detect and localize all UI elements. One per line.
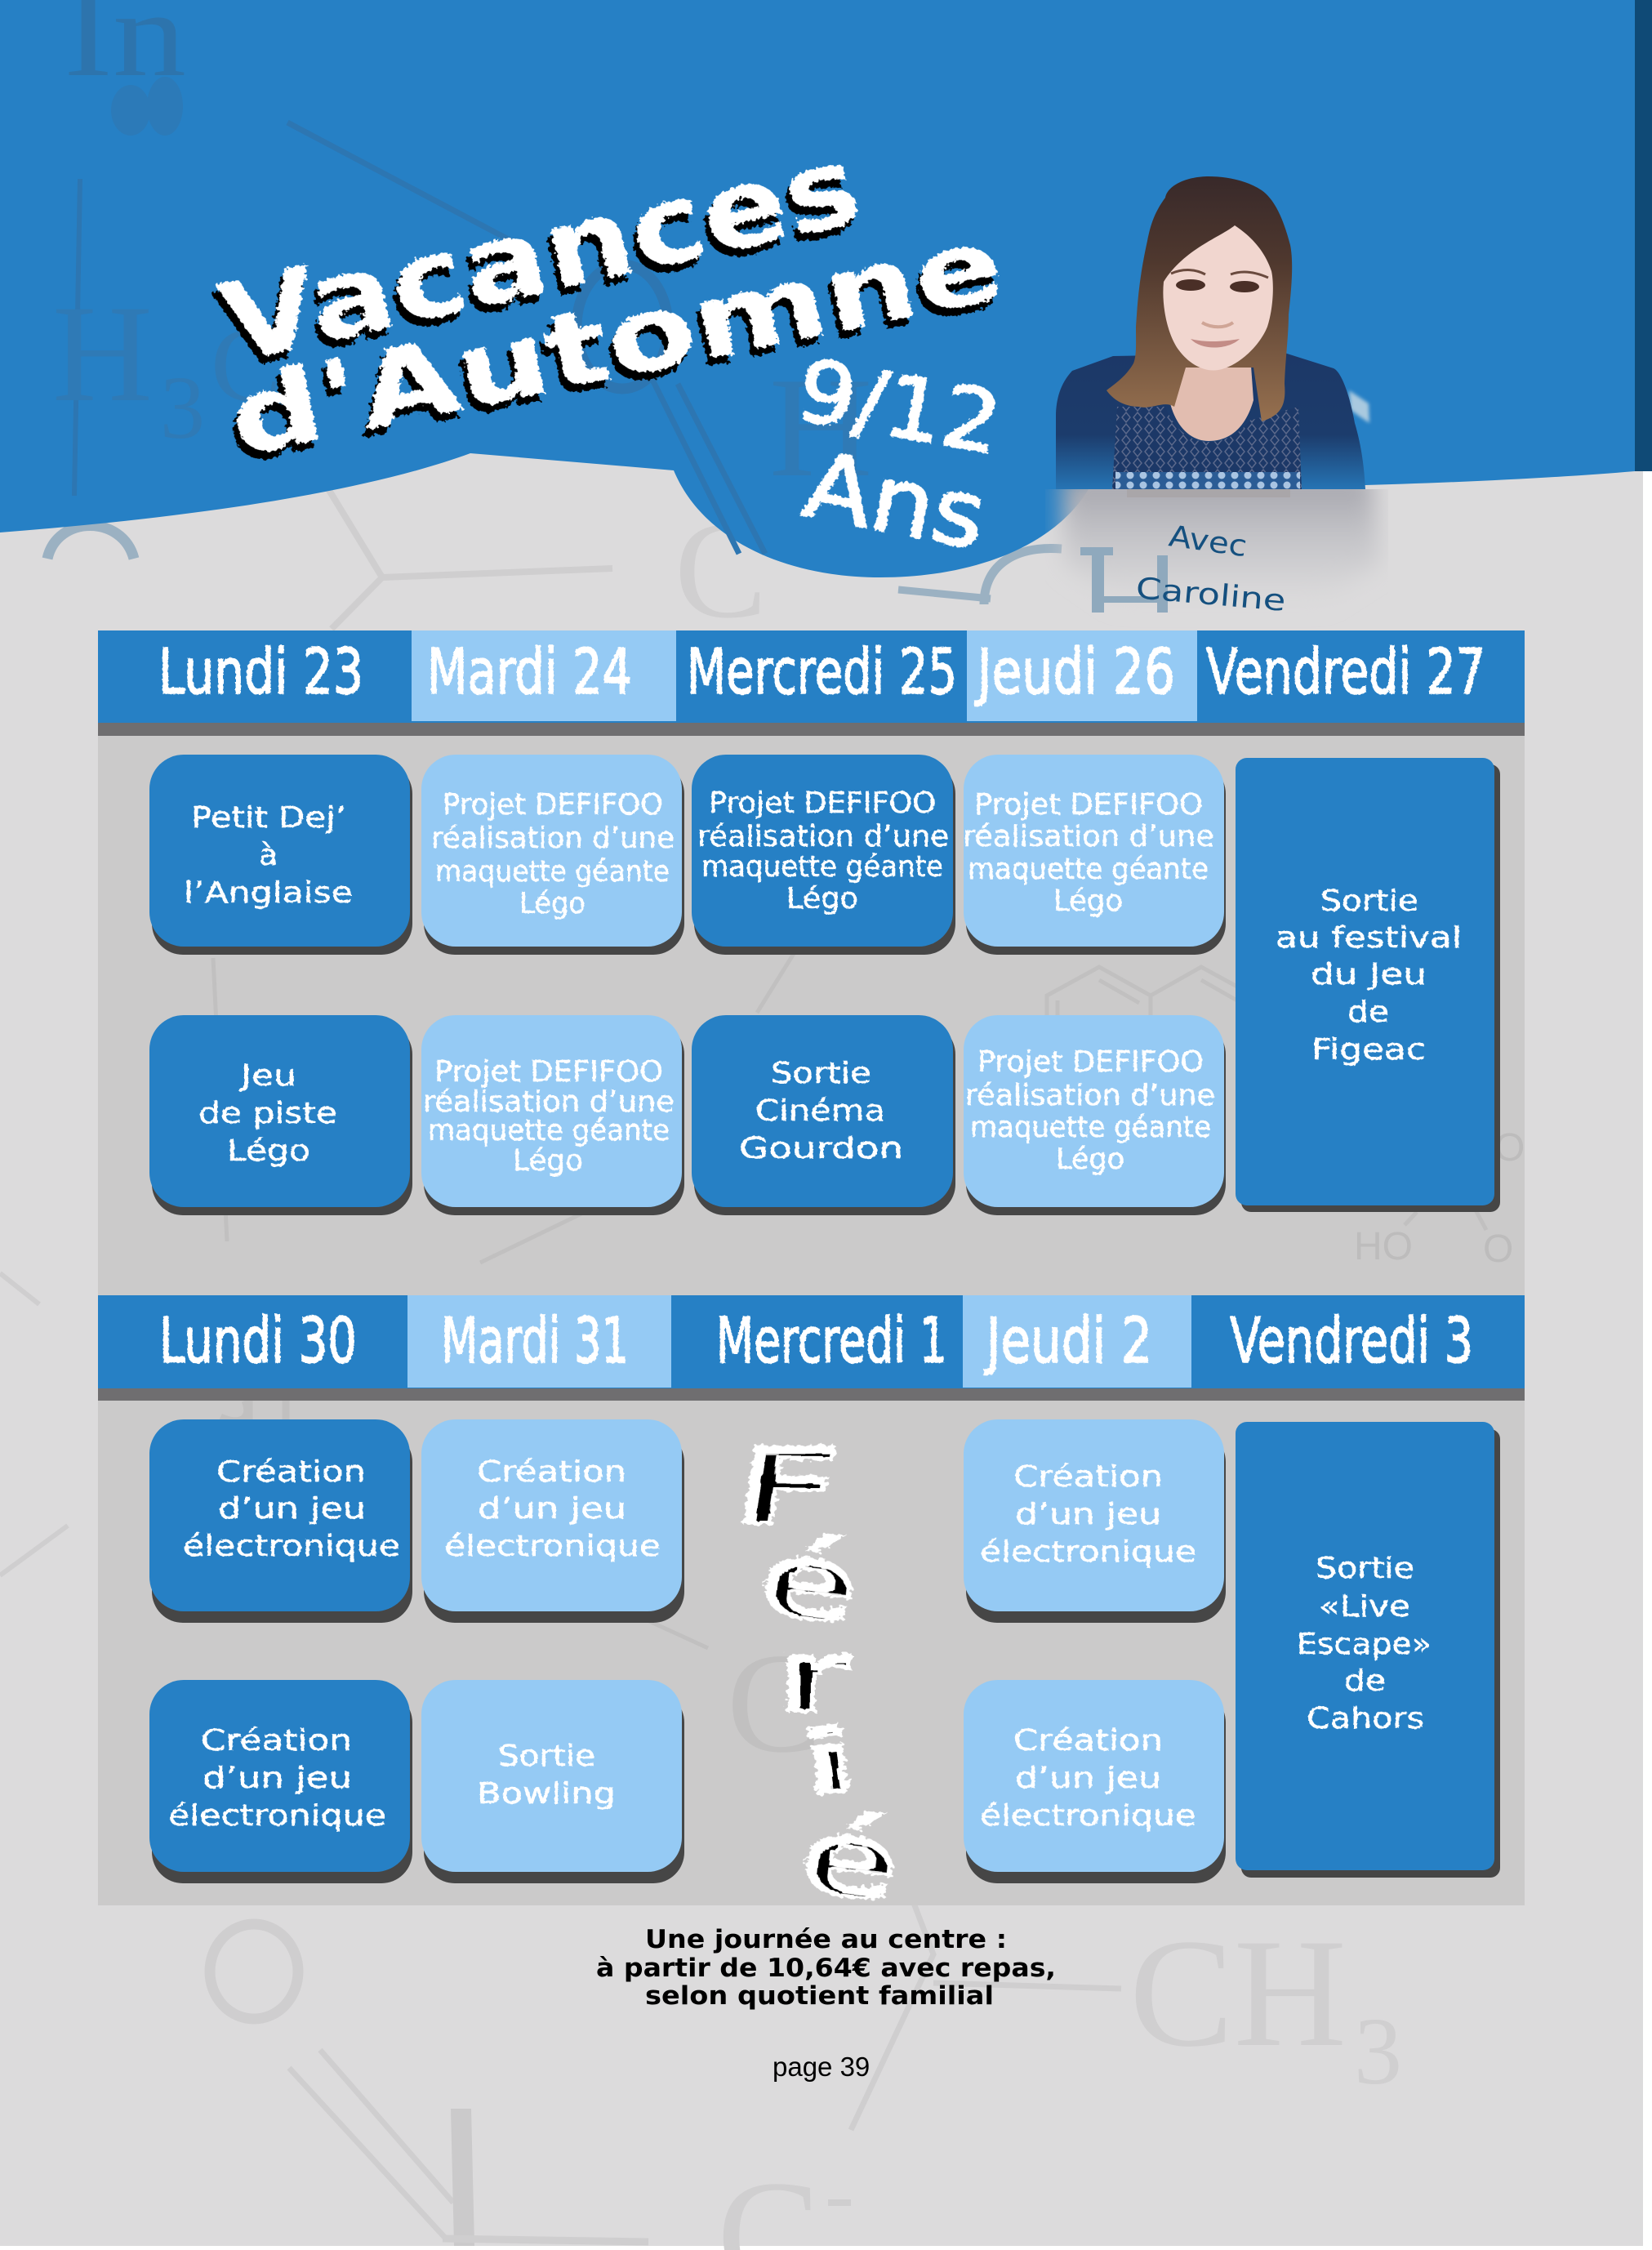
card: Jeu de piste Lego: Légo bbox=[227, 1134, 310, 1168]
card: Creation d'un jeu Jeudi 2 morning: électronique bbox=[980, 1535, 1196, 1569]
day: Mercredi 1: Mercredi 1 bbox=[716, 1305, 947, 1378]
age range: 9/12 bbox=[790, 340, 1009, 474]
card: Sortie au festival du Jeu de Figeac: Sortie bbox=[1320, 884, 1418, 918]
card: Creation d'un jeu Lundi 30 morning: Création bbox=[216, 1455, 366, 1489]
card: Sortie au festival du Jeu de Figeac: de bbox=[1347, 996, 1389, 1029]
day: Vendredi 3: Vendredi 3 bbox=[1230, 1305, 1473, 1378]
day: Mardi 31: Mardi 31 bbox=[441, 1305, 629, 1378]
title line 2: d'Automne bbox=[219, 203, 1013, 479]
background: ghost chemistry formulas on grey: CH bbox=[1129, 1908, 1347, 2079]
photo: beaded hem bbox=[1115, 472, 1300, 489]
card: Sortie Live Escape de Cahors: «Live bbox=[1319, 1590, 1410, 1624]
photo caption: Avec: Avec bbox=[1167, 519, 1249, 564]
dark right edge strip bbox=[1635, 0, 1652, 471]
card: Jeu de piste Lego bbox=[149, 1015, 412, 1215]
card: Creation d'un jeu Mardi 31 morning: électronique bbox=[444, 1530, 661, 1563]
card: Projet DEFIFOO Jeudi 26 morning: maquette géante bbox=[968, 853, 1209, 886]
card: Projet DEFIFOO Jeudi 26 morning: Légo bbox=[1053, 884, 1123, 918]
day: Lundi 23: Lundi 23 bbox=[158, 636, 363, 709]
title line 1: Vacances bbox=[210, 121, 871, 388]
card: Sortie Live Escape de Cahors: Cahors bbox=[1307, 1702, 1424, 1735]
card: Jeu de piste Lego: Jeu bbox=[239, 1059, 296, 1093]
photo caption: Caroline: Caroline bbox=[1134, 572, 1287, 618]
panel: ghost molecules behind the schedule: O bbox=[1494, 1126, 1525, 1170]
vertical label: Ferie bbox=[724, 1424, 907, 1928]
pricing note: Une journée au centre : bbox=[645, 1925, 1007, 1954]
card: Projet DEFIFOO Mardi 24 afternoon: Légo bbox=[513, 1144, 583, 1178]
background: ghost chemistry formulas on grey: 3 bbox=[1354, 1998, 1402, 2105]
background: ghost formulas on blue: 3 bbox=[160, 358, 205, 457]
card: Projet DEFIFOO Mercredi 25 morning: maquette géante bbox=[701, 850, 943, 884]
photo: paint splash bbox=[1349, 390, 1369, 423]
background: ghost formulas on blue: H bbox=[769, 348, 872, 506]
letter r: r bbox=[774, 1615, 853, 1738]
letter i: i bbox=[793, 1705, 866, 1820]
card: Projet DEFIFOO Jeudi 26 afternoon: réalisation d’une bbox=[965, 1079, 1215, 1112]
photo: Caroline bbox=[1056, 176, 1380, 618]
card: Sortie Cinema Gourdon bbox=[692, 1015, 955, 1215]
card: Petit Dej' a l'Anglaise: Petit Dej’ bbox=[191, 801, 346, 835]
card: Creation d'un jeu Jeudi 2 morning: Création bbox=[1013, 1460, 1163, 1494]
day: Mercredi 25: Mercredi 25 bbox=[687, 636, 957, 709]
day: Jeudi 2: Jeudi 2 bbox=[984, 1305, 1152, 1378]
day: Mardi 24: Mardi 24 bbox=[427, 636, 632, 709]
pricing note bbox=[596, 1925, 1056, 2011]
background: blue-grey ghost fragments below the wave bbox=[47, 526, 1062, 604]
card: Projet DEFIFOO Mardi 24 morning: réalisation d’une bbox=[431, 822, 675, 855]
photo: neck and chest bbox=[1169, 343, 1253, 441]
card: Sortie au festival du Jeu de Figeac: Figeac bbox=[1311, 1033, 1426, 1067]
card: Projet DEFIFOO Mercredi 25 morning: Projet DEFIFOO bbox=[709, 786, 936, 820]
photo: face bbox=[1163, 225, 1273, 371]
card: Projet DEFIFOO Jeudi 26 afternoon: Légo bbox=[1056, 1143, 1124, 1176]
card: Petit Dej' a l'Anglaise bbox=[149, 755, 412, 955]
card: Creation d'un jeu Lundi 30 afternoon: Création bbox=[201, 1724, 352, 1758]
card: Creation d'un jeu Lundi 30 morning: électronique bbox=[183, 1530, 400, 1563]
panel: ghost molecules behind the schedule: C bbox=[727, 1624, 822, 1782]
card: Creation d'un jeu Jeudi 2 morning bbox=[964, 1419, 1226, 1623]
card: Creation d'un jeu Jeudi 2 afternoon bbox=[964, 1680, 1226, 1883]
card: Projet DEFIFOO Mardi 24 morning: Projet DEFIFOO bbox=[443, 788, 663, 822]
header band: week 2 bbox=[98, 1295, 1525, 1401]
card: Sortie au festival du Jeu de Figeac: au festival bbox=[1276, 921, 1462, 955]
card: Projet DEFIFOO Jeudi 26 morning: réalisation d’une bbox=[963, 820, 1214, 853]
card: Creation d'un jeu Lundi 30 morning: d’un jeu bbox=[218, 1492, 366, 1526]
card: Petit Dej' a l'Anglaise: à bbox=[259, 839, 278, 872]
card: Projet DEFIFOO Mercredi 25 morning: réalisation d’une bbox=[697, 820, 949, 853]
photo: ghost H behind caption bbox=[1080, 547, 1168, 613]
card: Creation d'un jeu Jeudi 2 afternoon: d’un jeu bbox=[1015, 1762, 1161, 1795]
letter e acute: é bbox=[753, 1512, 866, 1651]
blue wave header bbox=[0, 0, 1635, 577]
card: Sortie Live Escape de Cahors bbox=[1236, 1422, 1500, 1878]
card: Projet DEFIFOO Mardi 24 afternoon: maquette géante bbox=[428, 1114, 670, 1147]
background: ghost formulas on blue: H bbox=[52, 277, 153, 430]
photo: lace top bbox=[1112, 407, 1302, 489]
card: Projet DEFIFOO Mercredi 25 morning: Légo bbox=[786, 882, 858, 916]
card: Sortie Bowling: Sortie bbox=[498, 1740, 595, 1773]
card: Projet DEFIFOO Jeudi 26 morning: Projet DEFIFOO bbox=[974, 788, 1203, 822]
photo: fade under the wave bbox=[1045, 489, 1384, 578]
card: Creation d'un jeu Jeudi 2 morning: d’un jeu bbox=[1015, 1498, 1161, 1531]
day: Jeudi 26: Jeudi 26 bbox=[975, 636, 1175, 709]
photo: eyes, brows, nose, mouth bbox=[1171, 270, 1268, 348]
photo: shirt bbox=[1056, 353, 1365, 489]
card: Creation d'un jeu Jeudi 2 afternoon: électronique bbox=[980, 1799, 1196, 1833]
card: Creation d'un jeu Lundi 30 morning bbox=[149, 1419, 412, 1623]
card: Petit Dej' a l'Anglaise: l’Anglaise bbox=[184, 876, 353, 910]
page number: page 39 bbox=[773, 2052, 870, 2082]
card: Sortie Bowling bbox=[421, 1680, 684, 1883]
card: Creation d'un jeu Lundi 30 afternoon: d’un jeu bbox=[203, 1762, 352, 1795]
panel: ghost molecules behind the schedule bbox=[213, 946, 1525, 1782]
card: Sortie Live Escape de Cahors: Sortie bbox=[1316, 1552, 1414, 1585]
card: Jeu de piste Lego: de piste bbox=[198, 1097, 337, 1130]
card: Sortie Live Escape de Cahors: de bbox=[1344, 1664, 1386, 1698]
card: Projet DEFIFOO Jeudi 26 morning bbox=[963, 755, 1226, 955]
panel: ghost molecules behind the schedule: O bbox=[1483, 1227, 1513, 1271]
card: Creation d'un jeu Lundi 30 afternoon bbox=[149, 1680, 412, 1883]
card: Sortie Live Escape de Cahors: Escape» bbox=[1297, 1628, 1432, 1661]
card: Projet DEFIFOO Mardi 24 morning bbox=[421, 755, 684, 955]
card: Sortie Bowling: Bowling bbox=[477, 1777, 616, 1811]
background: ghost formulas on blue: C bbox=[211, 306, 282, 424]
card: Projet DEFIFOO Mardi 24 afternoon: réalisation d’une bbox=[423, 1085, 675, 1119]
card: Projet DEFIFOO Jeudi 26 afternoon: Projet DEFIFOO bbox=[977, 1045, 1204, 1079]
background: ghost chemistry formulas on grey: C bbox=[675, 493, 767, 647]
card: Sortie Cinema Gourdon: Gourdon bbox=[739, 1132, 903, 1165]
day: Lundi 30: Lundi 30 bbox=[159, 1305, 357, 1378]
card: Projet DEFIFOO Mardi 24 afternoon: Projet DEFIFOO bbox=[434, 1055, 663, 1089]
card: Creation d'un jeu Lundi 30 afternoon: électronique bbox=[168, 1799, 386, 1833]
card: Projet DEFIFOO Jeudi 26 afternoon: maquette géante bbox=[970, 1111, 1211, 1144]
background: ghost formulas on blue bbox=[52, 0, 872, 554]
card: Creation d'un jeu Mardi 31 morning bbox=[421, 1419, 684, 1623]
card: Creation d'un jeu Jeudi 2 afternoon: Création bbox=[1013, 1724, 1163, 1758]
card: Sortie Cinema Gourdon: Sortie bbox=[771, 1057, 871, 1090]
panel: ghost molecules behind the schedule: HO bbox=[1354, 1225, 1413, 1268]
background: ghost chemistry formulas on grey bbox=[0, 483, 1402, 2250]
card: Projet DEFIFOO Mardi 24 morning: maquette géante bbox=[435, 855, 670, 889]
pricing note: à partir de 10,64€ avec repas, bbox=[596, 1954, 1056, 1983]
age badge: 9/12 Ans bbox=[790, 340, 1009, 571]
card: Projet DEFIFOO Jeudi 26 afternoon bbox=[964, 1015, 1226, 1215]
card: Projet DEFIFOO Mardi 24 morning: Légo bbox=[519, 887, 586, 920]
card: Projet DEFIFOO Mercredi 25 morning bbox=[692, 755, 955, 955]
card: Sortie au festival du Jeu de Figeac: du Jeu bbox=[1311, 958, 1427, 991]
letter F: F bbox=[724, 1424, 853, 1551]
card: Sortie Cinema Gourdon: Cinéma bbox=[755, 1094, 885, 1128]
card: Creation d'un jeu Mardi 31 morning: Création bbox=[477, 1455, 626, 1489]
card: Creation d'un jeu Mardi 31 morning: d’un jeu bbox=[478, 1492, 626, 1526]
header band: week 1 bbox=[98, 630, 1525, 736]
day: Vendredi 27: Vendredi 27 bbox=[1206, 636, 1485, 709]
pricing note: selon quotient familial bbox=[645, 1981, 994, 2011]
photo: hair bbox=[1107, 176, 1292, 421]
letter e acute: é bbox=[794, 1789, 907, 1928]
age unit: Ans bbox=[796, 432, 995, 571]
title: Vacances d'Automne bbox=[210, 121, 1013, 479]
card: Sortie au festival du Jeu de Figeac bbox=[1236, 758, 1500, 1212]
card: Projet DEFIFOO Mardi 24 afternoon bbox=[421, 1015, 684, 1215]
panel: schedule background bbox=[98, 723, 1525, 1905]
